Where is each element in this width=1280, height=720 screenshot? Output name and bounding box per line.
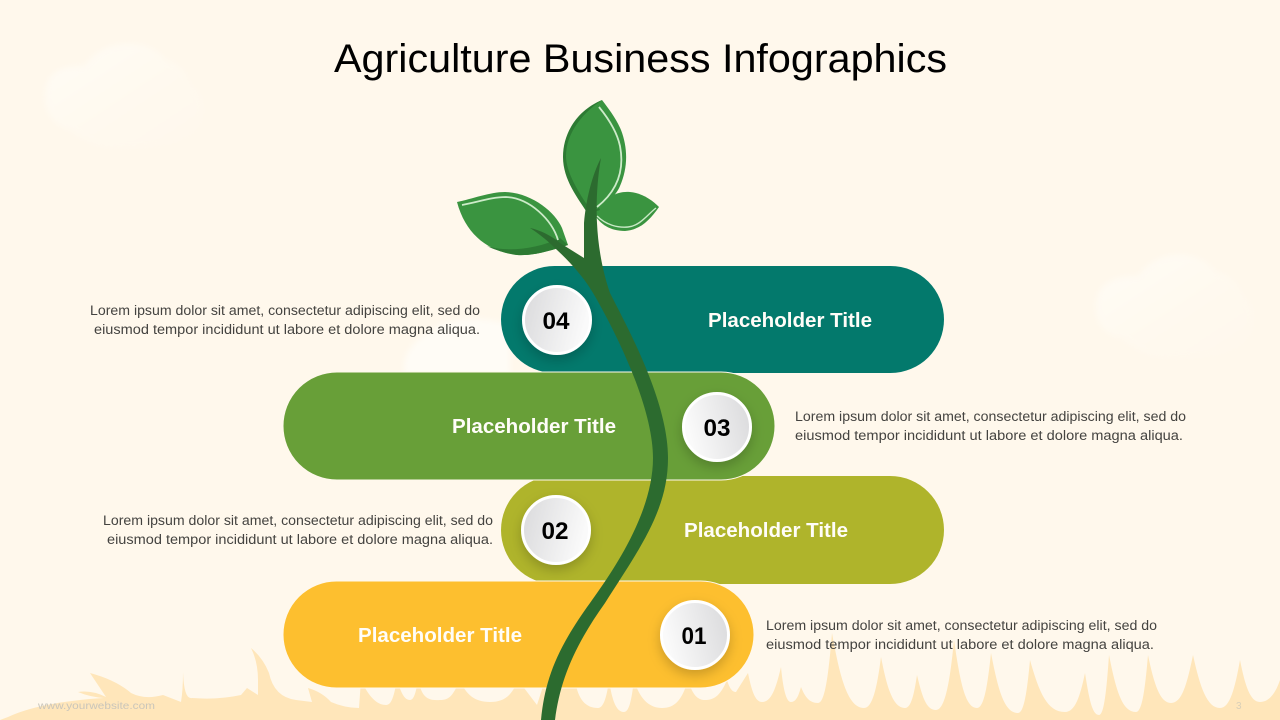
- title: Agriculture Business Infographics: [334, 37, 947, 81]
- badge 03: [684, 394, 750, 460]
- text block 02: Lorem ipsum dolor sit amet, consectetur adipiscing elit, sed do: [103, 513, 493, 528]
- text block 03: Lorem ipsum dolor sit amet, consectetur adipiscing elit, sed do: [795, 409, 1186, 424]
- text block 04: [90, 303, 480, 337]
- page number: 3: [1236, 701, 1242, 712]
- badge 01: 01: [682, 623, 706, 650]
- plant: [457, 100, 668, 720]
- badge 03: 03: [704, 415, 730, 442]
- panel 02 title: Placeholder Title: [684, 519, 848, 542]
- panel 02: olive pill: [501, 476, 944, 584]
- leaf: top: [563, 100, 626, 214]
- text block 03: [795, 409, 1186, 443]
- cloud: right: [1096, 255, 1254, 358]
- cloud: top left: [45, 44, 204, 148]
- cloud: behind teal pill: [404, 319, 510, 375]
- panel 03: green pill: [283, 372, 775, 480]
- text block 01: eiusmod tempor incididunt ut labore et dolore magna aliqua.: [766, 637, 1154, 652]
- stem: [530, 158, 668, 720]
- text block 02: [103, 513, 493, 547]
- text block 03: eiusmod tempor incididunt ut labore et dolore magna aliqua.: [795, 428, 1183, 443]
- leaf: right small: [594, 192, 659, 231]
- panel 03 title: Placeholder Title: [452, 415, 616, 438]
- text block 01: [766, 618, 1157, 652]
- badge 02: [522, 496, 590, 564]
- badge 04: 04: [542, 308, 570, 335]
- badge 04: [524, 286, 590, 354]
- badge 02: 02: [542, 518, 568, 545]
- badge 01: [662, 602, 728, 668]
- text block 04: Lorem ipsum dolor sit amet, consectetur adipiscing elit, sed do: [90, 303, 480, 318]
- footer url: www.yourwebsite.com: [37, 701, 155, 712]
- panel 01 title: Placeholder Title: [358, 624, 522, 647]
- panel 01: yellow pill: [283, 581, 754, 688]
- panel 04: teal pill: [501, 266, 944, 373]
- text block 02: eiusmod tempor incididunt ut labore et dolore magna aliqua.: [107, 532, 493, 547]
- panel 04 title: Placeholder Title: [708, 309, 872, 332]
- text block 01: Lorem ipsum dolor sit amet, consectetur adipiscing elit, sed do: [766, 618, 1157, 633]
- grass: [0, 633, 1280, 720]
- leaf: left: [457, 192, 568, 255]
- text block 04: eiusmod tempor incididunt ut labore et dolore magna aliqua.: [94, 322, 480, 337]
